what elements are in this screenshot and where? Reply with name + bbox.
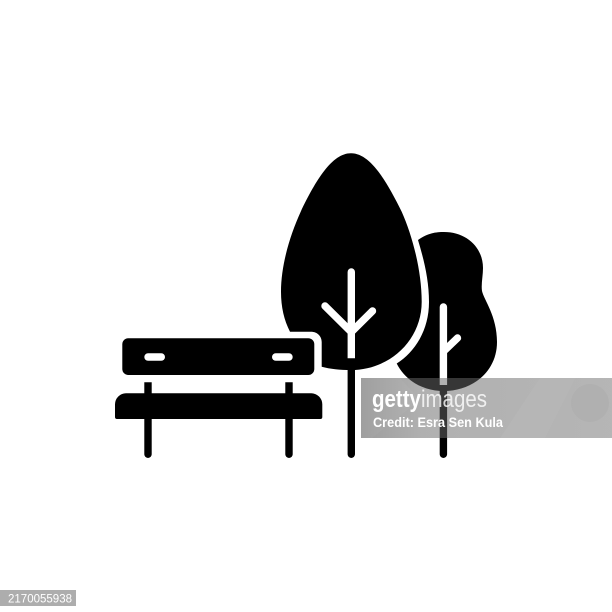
watermark credit: Credit: Esra Sen Kula [373,414,503,430]
small tree trunk [440,385,447,458]
icon: small tree [397,232,497,458]
large tree trunk [348,358,355,458]
large tree white trunk [348,268,355,358]
watermark circle [571,384,609,422]
bench legs [144,382,293,458]
watermark logo: gettyimages [372,386,487,413]
large tree white branches [325,306,372,332]
icon: large tree [281,153,422,458]
watermark background shapes [361,378,575,438]
bench backrest slots [144,353,293,361]
watermark banner [361,378,612,438]
image id strip [0,590,76,606]
small tree trunk highlight [440,303,447,385]
bench backrest [122,338,314,375]
image id: 2170055938 [8,592,72,606]
small tree branch [445,338,458,350]
icon: park bench [115,338,322,458]
bench seat [115,393,322,419]
